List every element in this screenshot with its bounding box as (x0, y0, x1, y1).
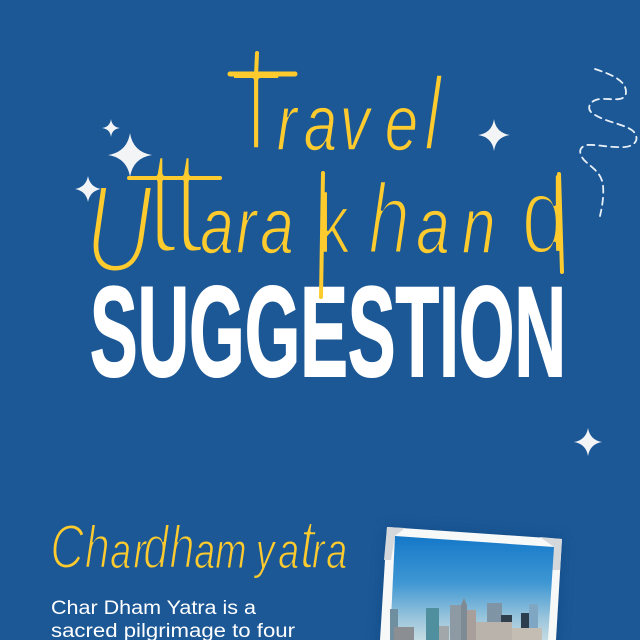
title: Uttarakhand: a (260, 181, 294, 270)
icon: left sparkle (75, 176, 101, 202)
heading: Chardham yatra: C (50, 511, 84, 582)
dashed travel route (580, 69, 636, 216)
title: Travel: r (277, 78, 299, 167)
skyline buildings (390, 598, 542, 640)
crossbar of T (230, 72, 295, 76)
title: Travel: v (340, 78, 373, 167)
title: Travel: a (304, 78, 337, 167)
heading: Chardham yatra: m (215, 524, 246, 579)
heading: Chardham yatra: y (253, 524, 277, 579)
title: Uttarakhand: k (318, 176, 350, 271)
body text (51, 598, 296, 640)
title: Uttarakhand: a (200, 181, 234, 270)
title: Uttarakhand: a (416, 181, 450, 270)
top of T stem (256, 53, 257, 76)
heading: Chardham yatra: t (300, 506, 317, 584)
heading: Chardham yatra: r (134, 524, 148, 579)
heading: Chardham yatra: a (194, 524, 215, 579)
heading: Chardham yatra: a (326, 524, 347, 579)
heading: Chardham yatra: a (110, 524, 131, 579)
heading: Chardham yatra: r (312, 524, 326, 579)
title: Uttarakhand: U (85, 160, 153, 299)
title: Uttarakhand: t (146, 116, 178, 286)
title: Uttarakhand: t (173, 116, 204, 286)
long stem of d (559, 174, 562, 272)
title: Travel: T (230, 49, 282, 175)
heading: Chardham yatra: d (143, 515, 170, 582)
heading: Chardham yatra: h (170, 515, 195, 582)
title: Uttarakhand: d (521, 153, 567, 277)
title: Uttarakhand: h (368, 162, 410, 274)
heading: Chardham yatra: a (278, 524, 299, 579)
icon: right sparkle (478, 119, 510, 151)
title: Travel: l (424, 55, 443, 173)
icon: small sparkle (102, 119, 120, 137)
title: Uttarakhand: r (236, 181, 258, 270)
crossbar of the double t (129, 176, 220, 180)
title: Uttarakhand: n (462, 181, 495, 270)
heading: Chardham yatra: h (85, 515, 110, 582)
icon: large sparkle (108, 133, 152, 177)
long stem of k (321, 173, 323, 297)
icon: lower sparkle (574, 428, 602, 456)
photo: polaroid of city skyline (378, 527, 562, 640)
body text: Char Dham Yatra is a (51, 598, 256, 619)
title: Travel: e (385, 78, 418, 167)
